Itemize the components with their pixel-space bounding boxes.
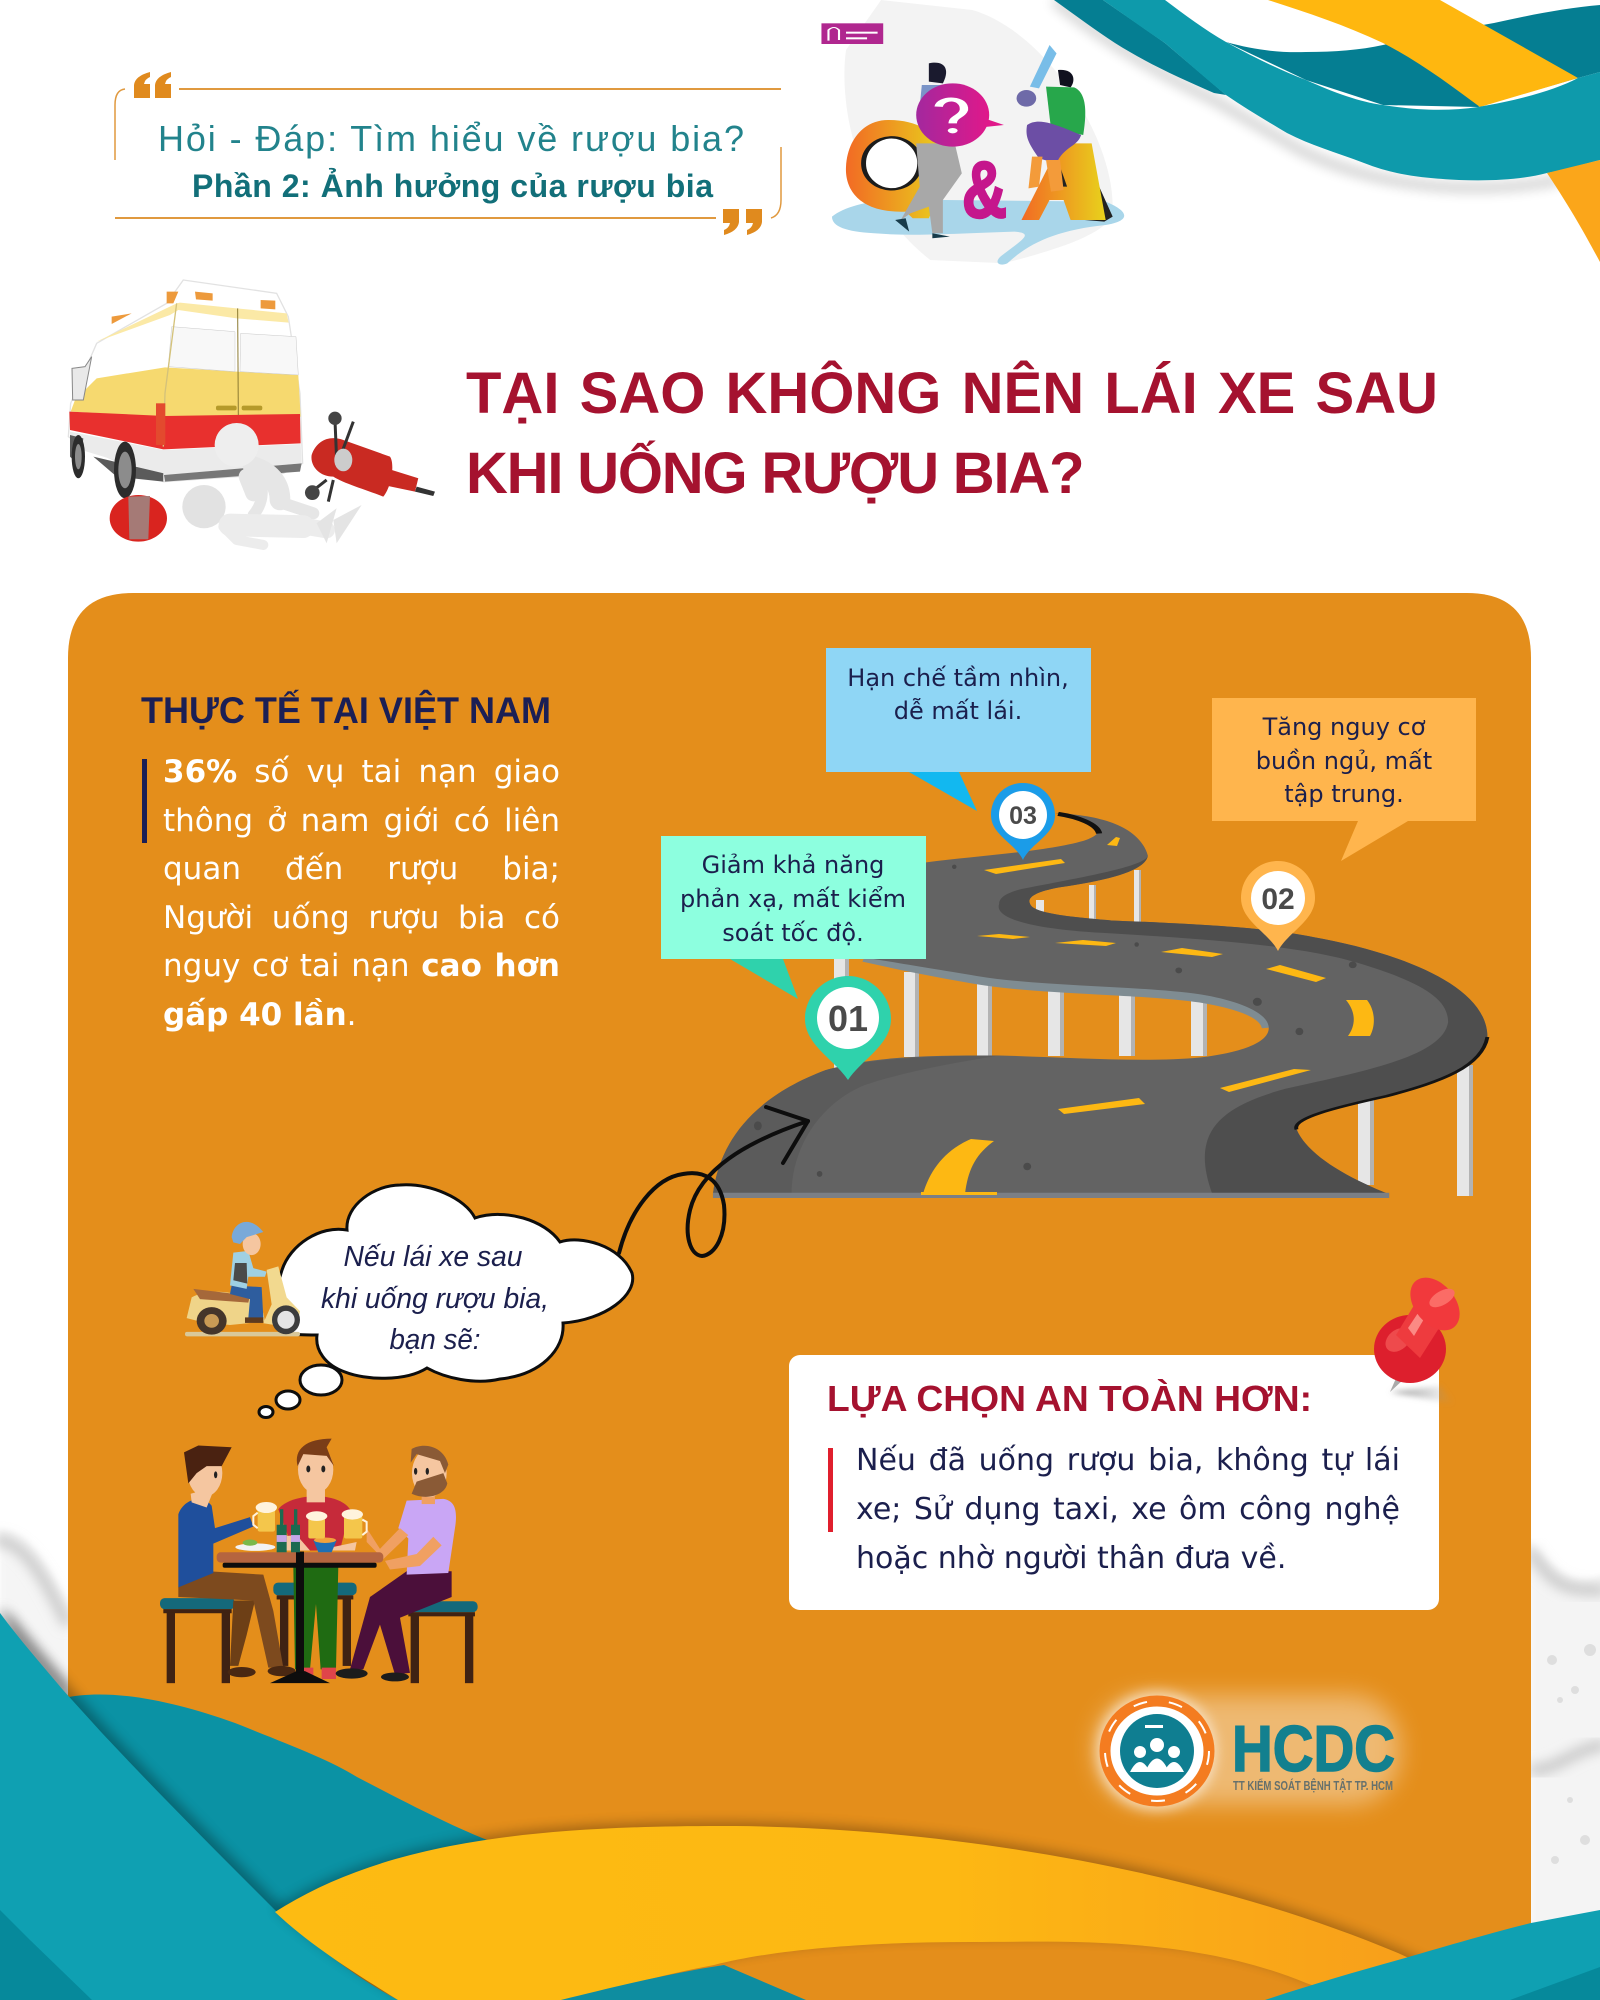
foam background right xyxy=(1530,1540,1600,1980)
heading: facts: THỰC TẾ TẠI VIỆT NAM xyxy=(141,689,551,731)
road lane markings xyxy=(921,837,1374,1195)
pin 01: 01 xyxy=(828,998,868,1039)
logo: HCDC: TT KIỂM SOÁT BỆNH TẬT TP. HCM xyxy=(1233,1778,1393,1793)
person left xyxy=(895,63,962,238)
scooter xyxy=(305,412,435,502)
kneeling figure xyxy=(247,467,313,515)
pillars xyxy=(834,870,1473,1196)
main title: TẠI SAO KHÔNG NÊN LÁI XE SAU xyxy=(466,361,1438,426)
callout 03: blue box: Hạn chế tầm nhìn, xyxy=(847,664,1069,692)
text block: facts in Vietnam: 36% số vụ tai nạn giao xyxy=(163,754,560,790)
text block: facts in Vietnam xyxy=(163,754,560,1033)
cloud speech bubble: bạn sẽ: xyxy=(390,1324,480,1356)
header title line 2: Phần 2: Ảnh hưởng của rượu bia xyxy=(192,168,713,204)
callout 01: green box: soát tốc độ. xyxy=(722,919,864,947)
accent bar: facts xyxy=(142,759,147,843)
tag xyxy=(821,23,883,44)
speech bubble with question mark xyxy=(916,83,1004,147)
thought bubbles xyxy=(259,1365,342,1418)
illustration: three friends drinking beer at a table xyxy=(160,1439,478,1683)
text block: facts in Vietnam: quan đến rượu bia; xyxy=(163,851,560,887)
pin 02 xyxy=(1241,861,1315,951)
pin 02: 02 xyxy=(1261,883,1295,916)
callout 03: blue box: dễ mất lái. xyxy=(894,696,1022,725)
logo mark xyxy=(1105,1701,1209,1801)
letter A xyxy=(1021,143,1113,222)
text block: facts in Vietnam: thông ở nam giới có liên xyxy=(163,803,560,839)
pin 03: 03 xyxy=(1009,802,1037,830)
arrow: hand drawn loop from cloud to road xyxy=(619,1107,808,1256)
chart: winding road with pillars xyxy=(713,813,1487,1196)
cloud speech bubble xyxy=(259,1185,633,1418)
figures xyxy=(182,423,362,545)
decoration: top right ribbons xyxy=(1054,0,1600,262)
text block: facts in Vietnam: nguy cơ tai nạn cao hơn xyxy=(163,948,560,984)
callout 03: blue box xyxy=(826,648,1091,811)
text block: safer choice: Nếu đã uống rượu bia, không tự lái xyxy=(856,1443,1400,1478)
callout 02: orange box: tập trung. xyxy=(1284,780,1404,808)
header frame with quotation marks xyxy=(115,72,781,235)
decoration: bottom ribbons xyxy=(0,1611,1600,2000)
icon: moped rider xyxy=(185,1222,300,1336)
letter Q xyxy=(846,120,946,218)
pin 03 xyxy=(991,783,1055,860)
callout 01: green box: phản xạ, mất kiểm xyxy=(680,885,906,913)
icon: Q&A illustration xyxy=(821,0,1124,265)
road surface xyxy=(713,813,1487,1195)
cloud speech bubble: khi uống rượu bia, xyxy=(321,1283,549,1315)
header title line 1: Hỏi - Đáp: Tìm hiểu về rượu bia? xyxy=(158,118,744,159)
accent bar: safer choice xyxy=(828,1448,833,1532)
person left xyxy=(178,1446,296,1677)
pin 01 xyxy=(805,976,891,1080)
beers and food xyxy=(235,1502,367,1552)
panel: orange background xyxy=(68,593,1531,2000)
logo: HCDC xyxy=(1095,1691,1400,1811)
foam background left xyxy=(0,1530,70,1770)
callout 01: green box: Giảm khả năng xyxy=(702,851,884,879)
callout 02: orange box: Tăng nguy cơ xyxy=(1262,713,1426,741)
panel: safer choice white card xyxy=(789,1355,1439,1610)
heading: safer choice: LỰA CHỌN AN TOÀN HƠN: xyxy=(827,1378,1312,1419)
icon: closing quote xyxy=(723,209,762,235)
main title xyxy=(466,360,1438,506)
stools xyxy=(160,1583,478,1683)
person right xyxy=(336,1446,456,1681)
text block: safer choice xyxy=(856,1443,1400,1576)
lying figure xyxy=(223,525,327,545)
icon: red push pin xyxy=(1374,1268,1470,1404)
text block: safer choice: hoặc nhờ người thân đưa về. xyxy=(856,1541,1286,1576)
callout 01: green box xyxy=(661,836,926,999)
table xyxy=(217,1552,383,1683)
icon: ambulance and accident illustration xyxy=(68,280,435,545)
callout 02: orange box: buồn ngủ, mất xyxy=(1256,747,1432,775)
person right xyxy=(1017,45,1085,192)
helmet xyxy=(110,495,167,542)
icon: opening quote xyxy=(134,72,171,98)
text block: facts in Vietnam: Người uống rượu bia có xyxy=(163,900,560,936)
main title: KHI UỐNG RƯỢU BIA? xyxy=(466,441,1083,506)
text block: facts in Vietnam: gấp 40 lần. xyxy=(163,997,356,1033)
text block: safer choice: xe; Sử dụng taxi, xe ôm công nghệ xyxy=(856,1492,1400,1527)
logo: HCDC: HCDC xyxy=(1232,1712,1395,1785)
ampersand: & xyxy=(962,145,1007,234)
cloud speech bubble: Nếu lái xe sau xyxy=(344,1241,522,1273)
person middle xyxy=(277,1439,357,1679)
ambulance xyxy=(68,280,303,498)
callout 02: orange box xyxy=(1212,698,1476,861)
